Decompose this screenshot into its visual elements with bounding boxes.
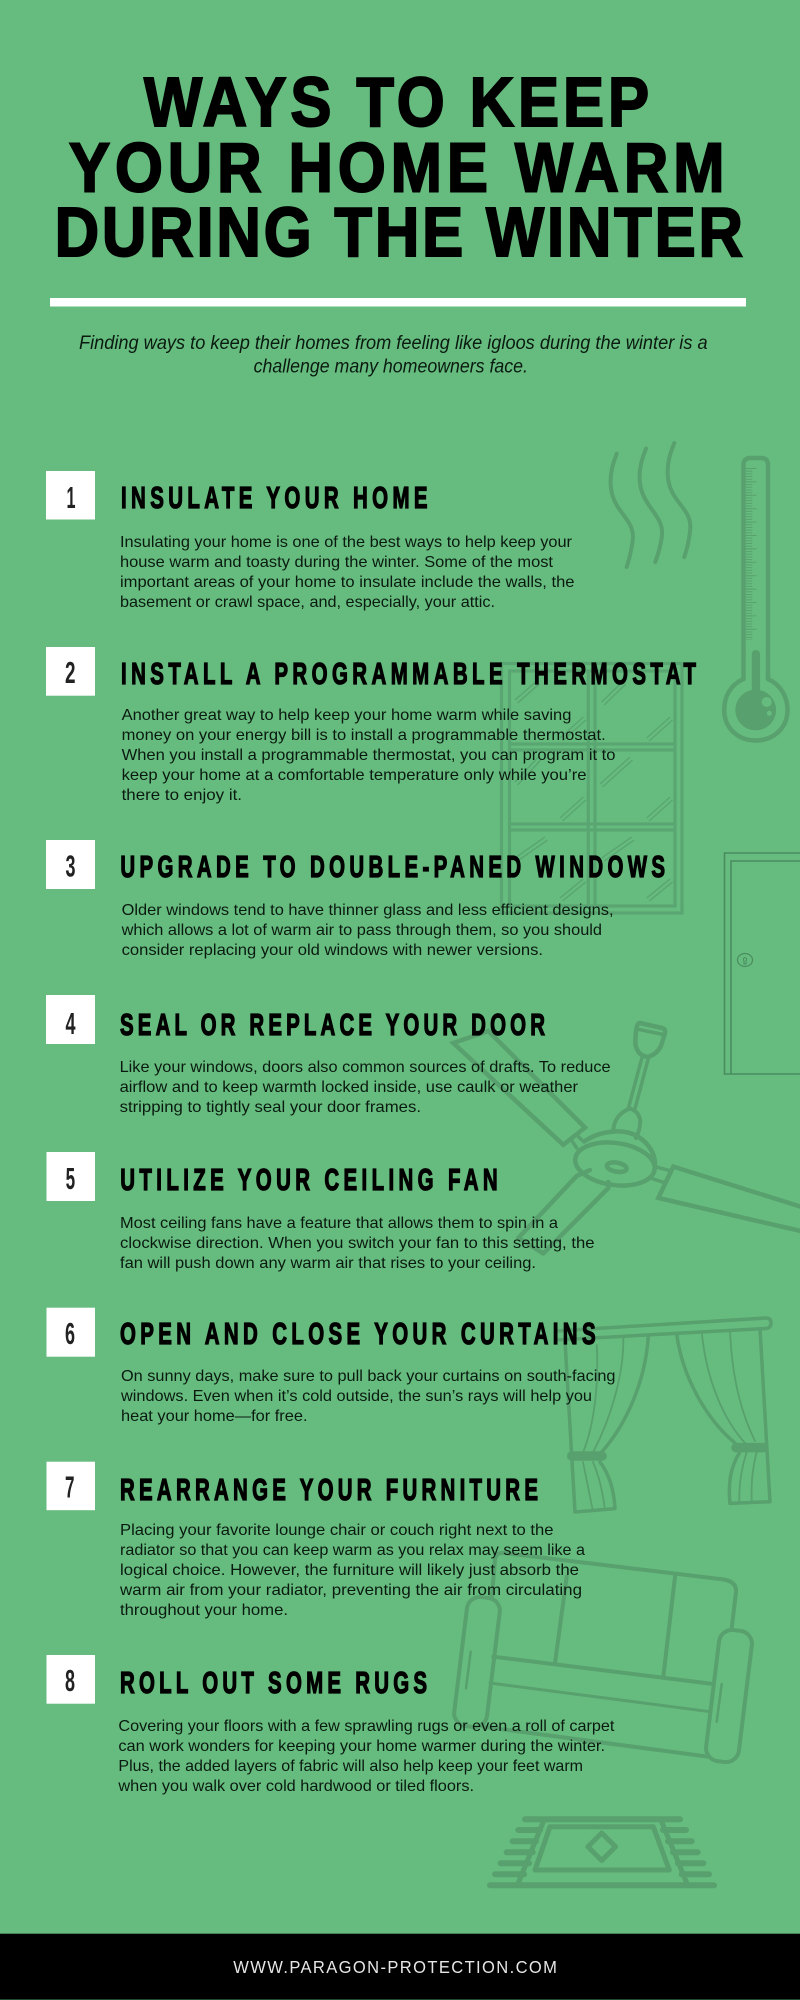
step 6: open and close your curtains <box>46 1308 616 1425</box>
icon: curtains <box>556 1318 771 1512</box>
step 2: install a programmable thermostat <box>46 647 696 804</box>
footer band: WWW.PARAGON-PROTECTION.COM <box>233 1956 557 1977</box>
subtitle: Finding ways to keep their homes from feeling like igloos during the winter is a <box>79 333 708 354</box>
step 7: rearrange your furniture: 7 <box>65 1470 74 1505</box>
step 5: utilize your ceiling fan: fan will push down any warm air that rises to your ceiling. <box>120 1255 536 1272</box>
step 7: rearrange your furniture: radiator so that you can keep warm as you relax may seem like a <box>120 1542 585 1559</box>
step 1: insulate your home: house warm and toasty during the winter. Some of the most <box>120 554 554 571</box>
step 1: insulate your home: 1 <box>66 480 76 515</box>
step 3: upgrade to double-paned windows: UPGRADE TO DOUBLE-PANED WINDOWS <box>120 849 665 884</box>
icon: window <box>502 664 682 913</box>
icon: rug <box>490 1819 714 1885</box>
step 2: install a programmable thermostat: keep your home at a comfortable temperature only while you’re <box>122 767 587 784</box>
step 4: seal or replace your door: stripping to tightly seal your door frames. <box>120 1099 421 1116</box>
step 5: utilize your ceiling fan: UTILIZE YOUR CEILING FAN <box>120 1162 498 1197</box>
subtitle: challenge many homeowners face. <box>254 356 528 378</box>
step 4: seal or replace your door: SEAL OR REPLACE YOUR DOOR <box>120 1007 545 1042</box>
step 5: utilize your ceiling fan: Most ceiling fans have a feature that allows them to spin in a <box>120 1215 558 1232</box>
step 2: install a programmable thermostat: When you install a programmable thermostat, you can program it to <box>122 747 616 764</box>
title: DURING THE WINTER <box>55 192 743 271</box>
step 8: roll out some rugs: Covering your floors with a few sprawling rugs or even a roll of carpet <box>118 1718 615 1735</box>
step 6: open and close your curtains: heat your home—for free. <box>121 1408 308 1425</box>
title <box>55 62 743 271</box>
step 6: open and close your curtains: On sunny days, make sure to pull back your curtains on south-facing <box>121 1368 616 1385</box>
step 4: seal or replace your door: Like your windows, doors also common sources of drafts. To reduce <box>120 1059 611 1076</box>
icon: heat waves <box>611 443 690 567</box>
step 5: utilize your ceiling fan: 5 <box>66 1161 75 1196</box>
step 4: seal or replace your door: 4 <box>66 1006 76 1041</box>
step 1: insulate your home <box>46 471 575 611</box>
step 4: seal or replace your door: airflow and to keep warmth locked inside, use caulk or weather <box>120 1079 579 1096</box>
step 2: install a programmable thermostat: Another great way to help keep your home warm while saving <box>122 707 571 724</box>
step 1: insulate your home: important areas of your home to insulate include the walls, the <box>120 574 575 591</box>
step 1: insulate your home: Insulating your home is one of the best ways to help keep your <box>120 534 573 551</box>
step 8: roll out some rugs: Plus, the added layers of fabric will also help keep your feet warm <box>118 1758 583 1775</box>
step 2: install a programmable thermostat: money on your energy bill is to install a programmable thermostat. <box>122 727 606 744</box>
step 7: rearrange your furniture <box>46 1462 585 1619</box>
step 3: upgrade to double-paned windows: consider replacing your old windows with newer versions. <box>122 942 543 959</box>
step 3: upgrade to double-paned windows: Older windows tend to have thinner glass and less efficient designs, <box>122 902 613 919</box>
step 8: roll out some rugs: when you walk over cold hardwood or tiled floors. <box>117 1778 474 1795</box>
step 2: install a programmable thermostat: 2 <box>65 655 76 690</box>
step 2: install a programmable thermostat: there to enjoy it. <box>122 787 242 804</box>
step 7: rearrange your furniture: REARRANGE YOUR FURNITURE <box>120 1472 538 1507</box>
step 1: insulate your home: basement or crawl space, and, especially, your attic. <box>120 594 495 611</box>
icon: thermometer <box>724 458 788 740</box>
step 6: open and close your curtains: windows. Even when it’s cold outside, the sun’s rays will help you <box>120 1388 592 1405</box>
step 5: utilize your ceiling fan: clockwise direction. When you switch your fan to this setting, the <box>120 1235 595 1252</box>
step 3: upgrade to double-paned windows: 3 <box>66 849 76 884</box>
step 3: upgrade to double-paned windows <box>46 840 665 959</box>
step 3: upgrade to double-paned windows: which allows a lot of warm air to pass through them, so you should <box>121 922 602 939</box>
step 8: roll out some rugs: 8 <box>65 1663 75 1698</box>
step 8: roll out some rugs: can work wonders for keeping your home warmer during the winter. <box>118 1738 605 1755</box>
icon: door <box>724 853 800 1074</box>
step 7: rearrange your furniture: Placing your favorite lounge chair or couch right next to the <box>120 1522 554 1539</box>
step 2: install a programmable thermostat: INSTALL A PROGRAMMABLE THERMOSTAT <box>121 656 696 691</box>
step 4: seal or replace your door <box>46 995 611 1116</box>
step 6: open and close your curtains: OPEN AND CLOSE YOUR CURTAINS <box>120 1316 596 1351</box>
step 7: rearrange your furniture: warm air from your radiator, preventing the air from circulating <box>119 1582 582 1599</box>
title: WAYS TO KEEP <box>144 62 649 141</box>
step 6: open and close your curtains: 6 <box>65 1316 75 1351</box>
step 8: roll out some rugs <box>46 1655 615 1795</box>
icon: sofa <box>453 1553 753 1764</box>
step 8: roll out some rugs: ROLL OUT SOME RUGS <box>120 1665 427 1700</box>
footer band <box>0 1934 800 2000</box>
icon: ceiling fan <box>453 1023 800 1253</box>
subtitle <box>79 333 708 378</box>
step 7: rearrange your furniture: throughout your home. <box>120 1602 288 1619</box>
title divider bar <box>50 298 746 306</box>
step 5: utilize your ceiling fan <box>46 1152 595 1272</box>
step 1: insulate your home: INSULATE YOUR HOME <box>121 480 428 515</box>
step 7: rearrange your furniture: logical choice. However, the furniture will likely just absorb the <box>120 1562 579 1579</box>
title: YOUR HOME WARM <box>69 128 725 206</box>
